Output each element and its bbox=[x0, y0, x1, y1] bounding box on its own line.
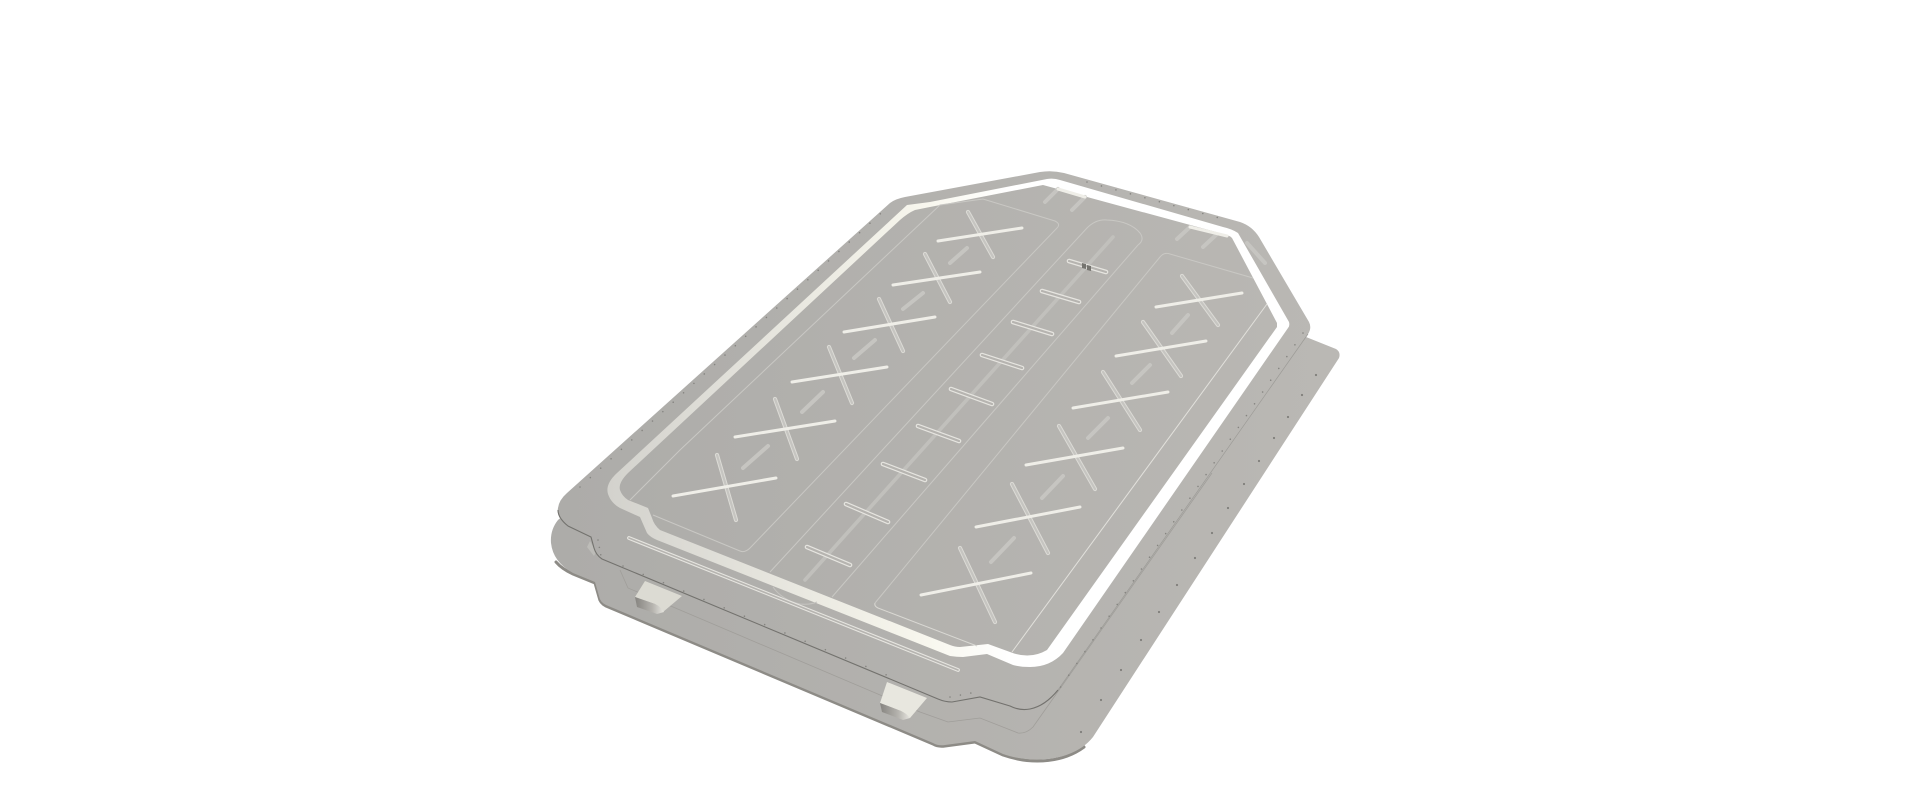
raised seal band bbox=[607, 179, 1289, 667]
small notch at left corner bbox=[587, 541, 596, 556]
top vents: left bbox=[1045, 189, 1085, 210]
cross 4 bbox=[844, 293, 935, 351]
panel outline: middle channel bbox=[770, 220, 1142, 597]
channel lower end bbox=[773, 587, 817, 604]
middle channel cross bars bbox=[807, 261, 1106, 565]
long slot along lower edge bbox=[629, 538, 958, 670]
lower plate bbox=[551, 300, 1340, 761]
cross 3 bbox=[792, 340, 887, 403]
cross 1 bbox=[673, 446, 776, 520]
cross 6 bbox=[938, 212, 1022, 257]
top vents: right bbox=[1177, 227, 1265, 263]
cross 4 bbox=[1026, 426, 1123, 498]
cross 2 bbox=[735, 392, 835, 459]
cross 3 bbox=[1073, 372, 1168, 438]
left panel crosses bbox=[673, 212, 1022, 520]
panel outline: right bbox=[875, 253, 1267, 652]
cross 2 bbox=[1116, 322, 1206, 383]
middle channel spine bbox=[805, 237, 1113, 580]
cross 5 bbox=[976, 484, 1080, 562]
cross 6 bbox=[921, 548, 1031, 622]
panel outline: left bbox=[630, 199, 1059, 552]
mounting tab: right bbox=[880, 682, 927, 720]
mounting tab: left bbox=[635, 581, 682, 614]
cross 1 bbox=[1156, 276, 1242, 333]
right panel crosses bbox=[921, 276, 1242, 622]
cross 5 bbox=[893, 248, 980, 302]
upper plate bbox=[558, 171, 1310, 710]
